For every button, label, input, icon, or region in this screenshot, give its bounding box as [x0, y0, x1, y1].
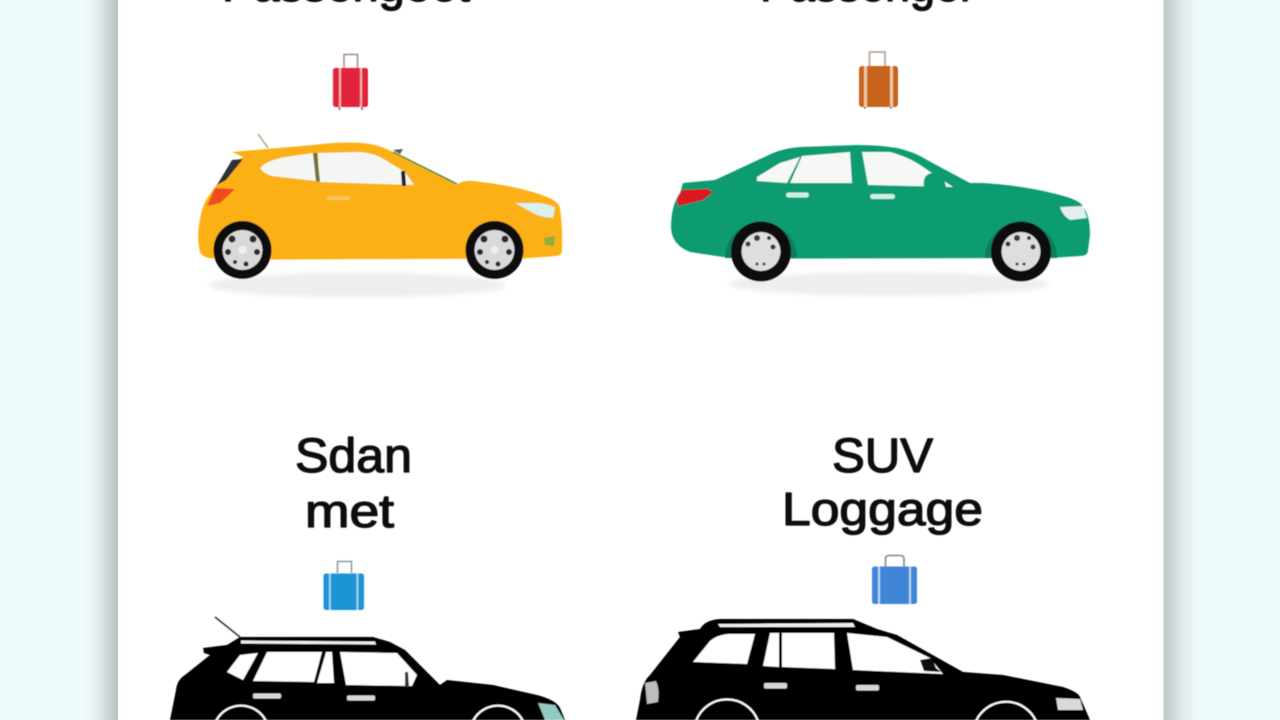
wheel: front: [991, 222, 1051, 282]
panel: sedan: [671, 0, 1090, 296]
car: black suv silhouette: [636, 619, 1090, 720]
shadow: sedan: [729, 272, 1049, 296]
car: yellow hatchback: [198, 134, 562, 279]
icon: red suitcase: [333, 54, 368, 110]
wheel: front: [466, 221, 524, 279]
icon: blue suitcase: [324, 562, 364, 610]
heading: sdan: Sdan: [295, 430, 412, 483]
subheading: loggage: Loggage: [782, 483, 983, 535]
car: black crossover silhouette: [170, 617, 565, 720]
wheel: rear: [731, 222, 791, 282]
icon: brown suitcase: [859, 52, 898, 108]
panel: sedan meet: [170, 430, 565, 720]
wheel: rear: [214, 221, 272, 279]
subheading: met: met: [305, 485, 394, 537]
panel right shadow: [1163, 0, 1201, 720]
panel: suv: [636, 430, 1090, 720]
shadow: hatchback: [208, 272, 506, 298]
panel: hatchback: [198, 0, 562, 298]
icon: blue briefcase: [872, 556, 917, 604]
heading: suv: SUV: [832, 430, 933, 483]
car: green sedan: [671, 145, 1090, 282]
panel left shadow: [84, 0, 119, 720]
